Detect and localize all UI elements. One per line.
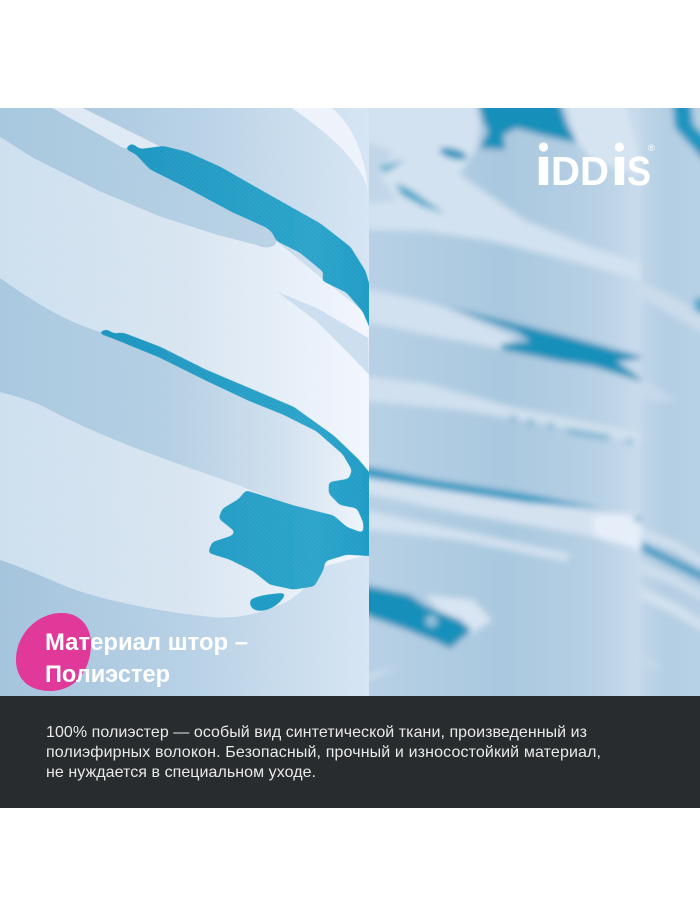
light wave band [0,135,373,617]
logo: IDDIS: ® [648,143,655,153]
photo: sharp foreground curtain fold with teal paint strokes [0,107,375,697]
heading: Материал штор – [45,629,248,656]
light stripe, top [52,108,160,149]
body text: полиэфирных волокон. Безопасный, прочный и износостойкий материал, [46,744,601,761]
dark shadow band, top [0,137,276,248]
teal droplet [250,594,285,610]
photo: blurred curtain folds in the background [369,108,700,696]
heading [45,629,248,688]
body text: 100% полиэстер — особый вид синтетической ткани, произведенный из [46,724,587,741]
heading: Полиэстер [45,661,170,688]
curtain fold: centre [369,108,645,696]
logo: IDDIS [534,142,655,194]
logo: IDDIS: D [551,148,580,194]
logo: IDDIS: S [627,148,651,194]
fabric base [0,107,370,697]
teal stroke, upper [126,144,373,333]
teal stroke and splash, lower [99,330,375,589]
teal strokes, splash and droplet [99,144,375,610]
pale slice, right [277,291,369,375]
logo: IDDIS: I [610,148,628,194]
body text: не нуждается в специальном уходе. [46,764,316,781]
white stripe, top right [290,107,368,195]
curtain fold: right [640,78,700,730]
logo: IDDIS: I [534,148,552,194]
medium wave band [0,278,340,520]
logo: IDDIS: D [580,148,609,194]
body text [46,724,601,781]
pink accent blob [16,613,91,691]
fabric weave texture [102,144,369,610]
dark text panel [0,696,700,808]
